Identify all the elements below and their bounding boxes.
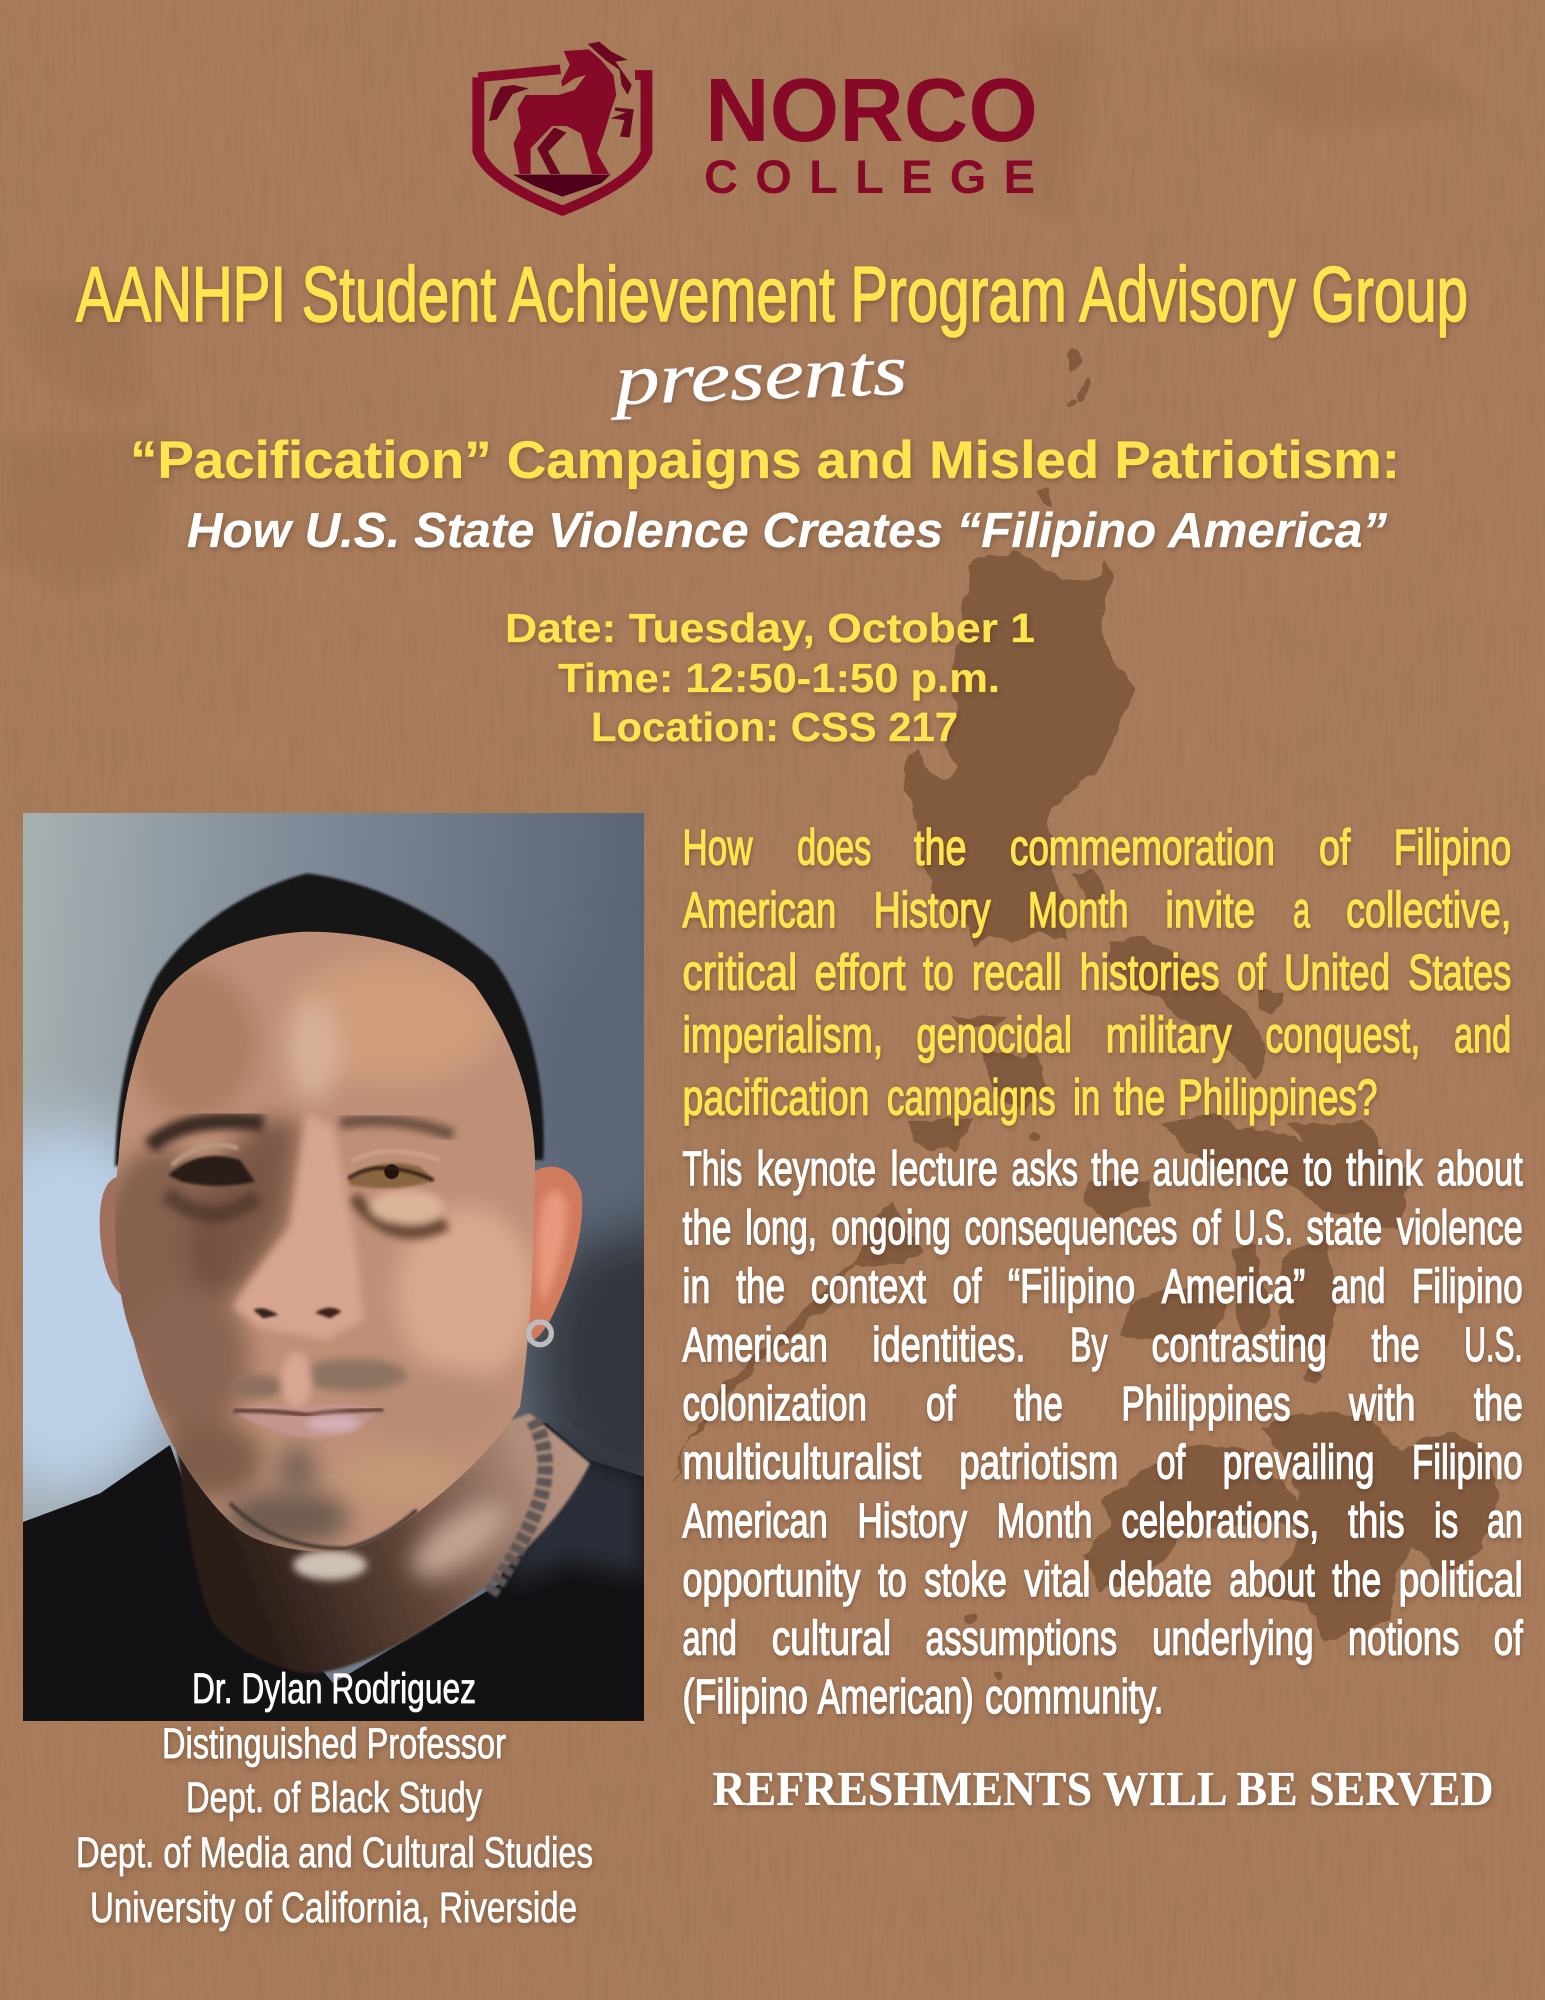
text block: opening question: the	[1114, 1070, 1165, 1125]
text block: opening question: conquest,	[1265, 1007, 1420, 1063]
logo wordmark: NORCO: NORCO	[705, 61, 1038, 161]
text block: lecture description: an	[1487, 1495, 1523, 1548]
text block: lecture description: Philippines	[1121, 1378, 1291, 1431]
event details: date, time, location: Time: 12:50-1:50 p.m.	[558, 655, 1000, 701]
text block: opening question: military	[1106, 1007, 1232, 1063]
text block: lecture description: This	[683, 1143, 742, 1196]
photo: face	[115, 932, 554, 1552]
photo: shirt	[23, 1420, 644, 1721]
text block: lecture description: the	[1091, 1143, 1139, 1196]
text block: lecture description: American	[683, 1319, 828, 1372]
speaker name and affiliations: Dept. of Black Study	[186, 1774, 482, 1822]
text block: opening question: histories	[1080, 945, 1220, 1000]
photo: neck	[177, 1413, 590, 1673]
text block: lecture description: community.	[985, 1671, 1164, 1724]
text block: lecture description: long,	[745, 1202, 817, 1255]
callout: refreshments notice: REFRESHMENTS WILL BE SERVED	[712, 1761, 1494, 1816]
text block: lecture description: celebrations,	[1121, 1495, 1319, 1548]
text block: opening question: and	[1454, 1007, 1511, 1063]
text block: opening question: a	[1293, 882, 1310, 938]
text block: opening question: effort	[815, 945, 906, 1000]
text block: lecture description: Filipino	[1412, 1260, 1523, 1313]
text block: lecture description: prevailing	[1223, 1436, 1374, 1489]
photo: earring	[529, 1322, 551, 1345]
speaker photo	[23, 813, 644, 1721]
text block: lecture description: with	[1348, 1378, 1415, 1431]
text block: lecture description: of	[1494, 1612, 1524, 1665]
text block: lecture description: patriotism	[959, 1436, 1118, 1489]
text block: opening question: of	[1237, 945, 1266, 1000]
text block: opening question	[683, 820, 1511, 1125]
text block: opening question: collective,	[1346, 882, 1511, 938]
text block: lecture description: state	[1306, 1202, 1382, 1255]
speaker name and affiliations: Dr. Dylan Rodriguez	[192, 1665, 476, 1713]
text block: lecture description: of	[1156, 1436, 1186, 1489]
text block: lecture description: multiculturalist	[683, 1436, 921, 1489]
speaker name and affiliations: Distinguished Professor	[162, 1720, 506, 1768]
text block: opening question: campaigns	[887, 1070, 1056, 1125]
text block: lecture description: Month	[997, 1495, 1092, 1548]
text block: lecture description: and	[1331, 1260, 1385, 1313]
text block: opening question: commemoration	[1010, 820, 1275, 875]
text block: lecture description: stoke	[924, 1554, 1007, 1607]
text block: opening question: States	[1408, 945, 1511, 1000]
text block: lecture description: lecture	[891, 1143, 998, 1196]
text block: lecture description: this	[1348, 1495, 1405, 1548]
text block: lecture description: the	[1474, 1378, 1523, 1431]
photo: stubble	[223, 1358, 417, 1548]
text block: lecture description: consequences	[965, 1202, 1177, 1255]
text block: opening question: of	[1319, 820, 1351, 875]
text block: lecture description: underlying	[1152, 1612, 1314, 1665]
text block: opening question: imperialism,	[683, 1007, 883, 1063]
event details: date, time, location: Date: Tuesday, October 1	[505, 605, 1035, 651]
text block: lecture description: political	[1399, 1554, 1523, 1607]
subheading: lecture subtitle: How U.S. State Violence Creates “Filipino America”	[187, 504, 1387, 558]
text block: opening question: History	[874, 882, 991, 938]
text block: lecture description: cultural	[772, 1612, 891, 1665]
text block: lecture description: American)	[818, 1671, 974, 1724]
heading: lecture title: “Pacification” Campaigns and Misled Patriotism:	[130, 431, 1400, 490]
photo: nose and mouth	[233, 1308, 383, 1438]
text block: lecture description: U.S.	[1234, 1202, 1293, 1255]
icon: shield with horse	[478, 42, 646, 211]
speaker name and affiliations: Dept. of Media and Cultural Studies	[76, 1829, 593, 1877]
event details: date, time, location: Location: CSS 217	[591, 704, 958, 750]
text block: lecture description: to	[878, 1554, 907, 1607]
text block: lecture description: the	[736, 1260, 785, 1313]
photo: wall background	[23, 813, 644, 1684]
text block: opening question: in	[1073, 1070, 1100, 1125]
speaker name and affiliations: University of California, Riverside	[90, 1884, 577, 1932]
text block: lecture description	[683, 1143, 1524, 1724]
text block: lecture description: colonization	[683, 1378, 867, 1431]
map: Visayas, Palawan and Mindanao	[670, 1118, 1501, 1677]
text block: opening question: United	[1284, 945, 1390, 1000]
text block: lecture description: violence	[1397, 1202, 1523, 1255]
photo: eyes and brows	[150, 1120, 453, 1188]
text block: opening question: Philippines?	[1178, 1070, 1377, 1125]
text block: opening question: pacification	[683, 1070, 869, 1125]
text block: lecture description: of	[1192, 1202, 1222, 1255]
text block: lecture description: vital	[1024, 1554, 1091, 1607]
text block: lecture description: notions	[1348, 1612, 1459, 1665]
text block: opening question: genocidal	[916, 1007, 1072, 1063]
text block: lecture description: American	[683, 1495, 828, 1548]
text block: opening question: Month	[1028, 882, 1129, 938]
text block: opening question: invite	[1165, 882, 1255, 938]
text block: opening question: recall	[972, 945, 1062, 1000]
text block: opening question: American	[683, 882, 836, 938]
text block: lecture description: of	[926, 1378, 956, 1431]
text block: lecture description: context	[811, 1260, 926, 1313]
script word: presents: presents	[608, 330, 908, 420]
text block: lecture description: audience	[1153, 1143, 1289, 1196]
text block: lecture description: By	[1070, 1319, 1108, 1372]
text block: lecture description: the	[1371, 1319, 1420, 1372]
text block: opening question: How	[683, 820, 753, 875]
background map of the Philippines	[670, 347, 1501, 1677]
photo: ears	[100, 1167, 582, 1343]
text block: lecture description: Filipino	[1412, 1436, 1523, 1489]
text block: opening question: Filipino	[1394, 820, 1511, 875]
text block: lecture description: asks	[1012, 1143, 1078, 1196]
text block: opening question: critical	[683, 945, 797, 1000]
event details: date, time, location	[505, 605, 1035, 750]
logo wordmark: COLLEGE: COLLEGE	[704, 150, 1035, 203]
text block: lecture description: the	[1014, 1378, 1063, 1431]
speaker name and affiliations	[76, 1665, 593, 1932]
text block: lecture description: keynote	[757, 1143, 876, 1196]
text block: lecture description: about	[1437, 1143, 1523, 1196]
text block: lecture description: assumptions	[925, 1612, 1117, 1665]
text block: opening question: does	[797, 820, 871, 875]
text block: opening question: to	[923, 945, 954, 1000]
photo: nose and under-eye modelling	[167, 1113, 447, 1340]
text block: lecture description: ongoing	[831, 1202, 951, 1255]
text block: lecture description: identities.	[872, 1319, 1026, 1372]
photo: hair	[115, 873, 544, 1167]
text block: lecture description: to	[1303, 1143, 1332, 1196]
map: Batanes islands	[1034, 347, 1094, 505]
text block: lecture description: contrasting	[1151, 1319, 1327, 1372]
text block: lecture description: of	[953, 1260, 982, 1313]
text block: lecture description: think	[1346, 1143, 1423, 1196]
text block: lecture description: in	[683, 1260, 710, 1313]
text block: lecture description: is	[1434, 1495, 1458, 1548]
text block: lecture description: the	[1332, 1554, 1381, 1607]
text block: lecture description: (Filipino	[683, 1671, 808, 1724]
text block: lecture description: and	[683, 1612, 737, 1665]
photo: facial shading	[97, 957, 537, 1510]
logo: Norco College	[478, 42, 1038, 211]
text block: lecture description: the	[683, 1202, 731, 1255]
text block: lecture description: debate	[1108, 1554, 1212, 1607]
photo: chain	[490, 1420, 545, 1593]
text block: opening question: the	[914, 820, 966, 875]
text block: lecture description: about	[1229, 1554, 1315, 1607]
text block: lecture description: “Filipino	[1008, 1260, 1135, 1313]
text block: lecture description: America”	[1162, 1260, 1305, 1313]
text block: lecture description: U.S.	[1464, 1319, 1523, 1372]
text block: lecture description: opportunity	[683, 1554, 861, 1607]
map: Luzon and nearby islands	[902, 553, 1286, 1160]
text block: lecture description: History	[857, 1495, 967, 1548]
